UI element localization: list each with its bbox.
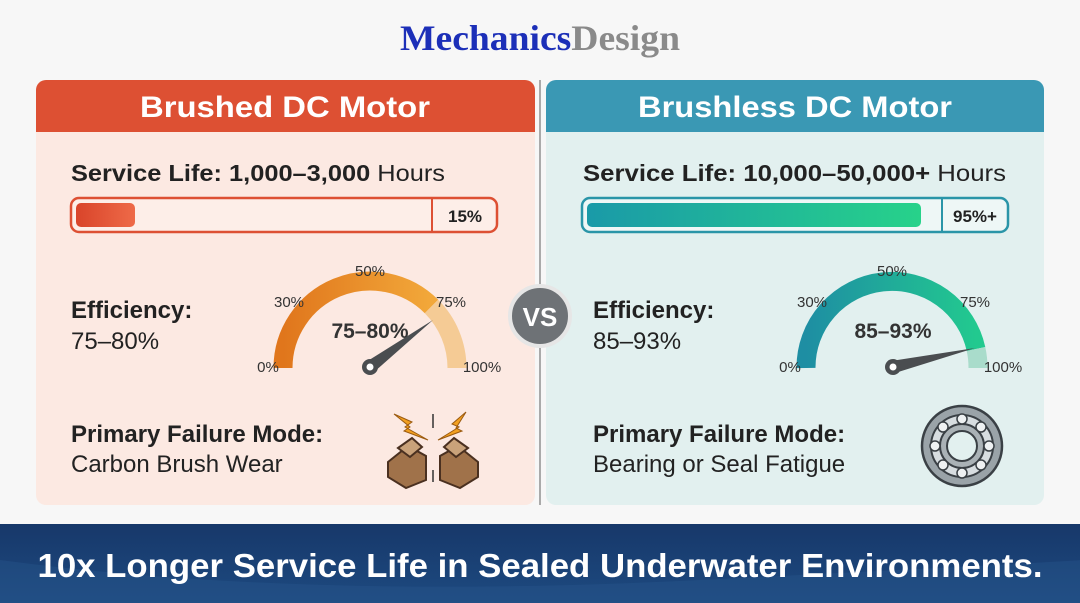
text: failure mode brushless: Primary Failure Mode: [593,421,845,448]
text: failure mode brushless: Bearing or Seal Fatigue [593,451,845,478]
heading: brushed [36,80,535,132]
progress bar: 95% [582,198,1008,232]
heading: brushed: Brushed DC Motor [140,91,430,124]
panel: brushed DC motor [36,80,535,505]
gauge: brushless efficiency: 30% [797,294,827,311]
gauge: brushed efficiency: 30% [274,294,304,311]
gauge: brushed efficiency: 75–80% [331,320,409,343]
VS badge: VS [523,302,557,332]
gauge: brushed efficiency: 50% [355,263,385,280]
text: failure mode brushed: Carbon Brush Wear [71,451,283,478]
gauge: brushless efficiency: 85–93% [854,320,932,343]
footer banner: 10x Longer Service Life in Sealed Underwater Environments. [38,547,1042,584]
footer banner [0,524,1080,603]
divider [539,80,541,505]
gauge: brushless efficiency: 100% [984,359,1022,376]
gauge: brushed efficiency [257,263,501,376]
text: service life brushed: Service Life: 1,000–3,000 Hours [71,160,445,186]
icon: bearing [922,406,1002,486]
gauge: brushless efficiency: 75% [960,294,990,311]
gauge: brushless efficiency: 50% [877,263,907,280]
text: efficiency brushless: Efficiency: [593,297,714,324]
text: efficiency brushed: 75–80% [71,328,159,355]
gauge: brushless efficiency [779,263,1022,376]
gauge: brushed efficiency: 100% [463,359,501,376]
VS badge [510,286,570,346]
text: efficiency brushed [71,297,192,355]
text: failure mode brushed: Primary Failure Mode: [71,421,323,448]
panel: brushless DC motor [546,80,1044,505]
text: efficiency brushless [593,297,714,355]
gauge: brushed efficiency: 0% [257,359,279,376]
heading: brushless [546,80,1044,132]
text: efficiency brushed: Efficiency: [71,297,192,324]
heading: brushless: Brushless DC Motor [638,91,952,124]
text: failure mode brushless [593,421,845,478]
text: service life brushless: Service Life: 10,000–50,000+ Hours [583,160,1006,186]
text: failure mode brushed [71,421,323,478]
gauge: brushed efficiency: 75% [436,294,466,311]
progress bar: 95%: 95%+ [953,207,997,226]
icon: broken carbon brushes [388,412,478,488]
progress bar: 15%: 15% [448,207,482,226]
text: efficiency brushless: 85–93% [593,328,681,355]
gauge: brushless efficiency: 0% [779,359,801,376]
progress bar: 15% [71,198,497,232]
logo: MechanicsDesign [400,18,680,58]
